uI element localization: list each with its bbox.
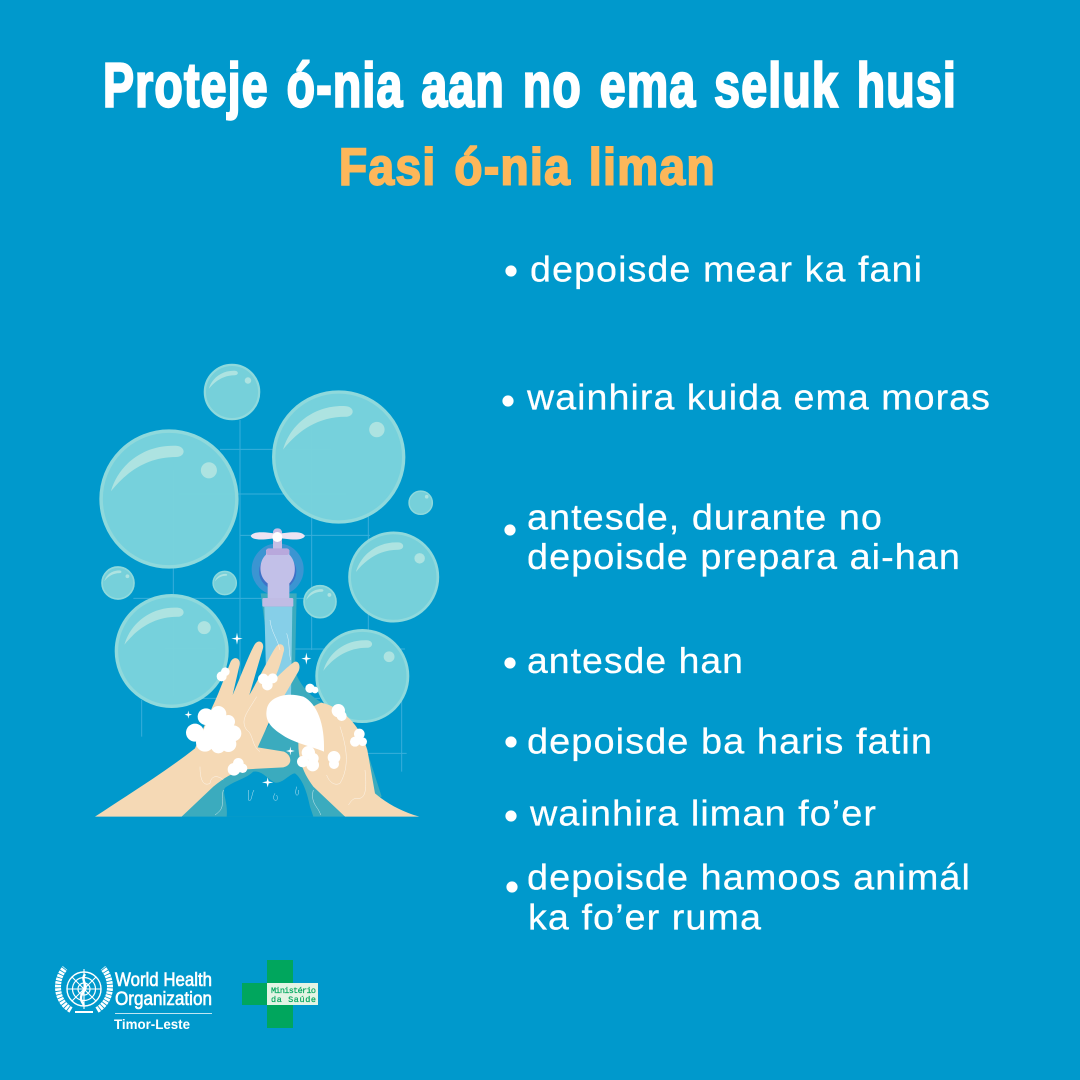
soap suds: [186, 667, 367, 776]
water splash: [182, 593, 382, 817]
list item: antesde, durante no: [527, 496, 883, 538]
right hand: [298, 703, 419, 817]
list item: ka fo’er ruma: [528, 896, 762, 938]
illustration: handwashing with bubbles: [95, 365, 438, 817]
bubble: [102, 567, 134, 599]
water highlight lines: [200, 620, 366, 815]
water drip cut-out: [224, 771, 313, 817]
list item: [506, 856, 971, 938]
list item: depoisde mear ka fani: [530, 248, 923, 290]
bubble: [205, 365, 259, 419]
bubble: [116, 596, 227, 706]
sparkles: [185, 633, 311, 787]
water stream: [264, 607, 292, 697]
logo: World Health Organization Timor-Leste: [58, 968, 212, 1032]
bubble: [101, 431, 237, 567]
bubble: [304, 586, 336, 618]
subtitle: Fasi ó-nia liman: [339, 138, 716, 196]
list item: wainhira kuida ema moras: [526, 376, 991, 418]
logo: World Health Organization Timor-Leste: Organization: [115, 989, 212, 1010]
soap: [266, 695, 324, 752]
left hand: [95, 642, 300, 817]
icon: WHO emblem: [58, 968, 110, 1012]
logo: Ministério da Saúde: Ministério: [271, 986, 316, 996]
list item: depoisde ba haris fatin: [527, 720, 933, 762]
list item: wainhira liman fo’er: [529, 792, 877, 834]
list item: [504, 496, 961, 577]
bubble: [317, 630, 408, 722]
list item: depoisde hamoos animál: [527, 856, 971, 898]
logo: Ministério da Saúde: da Saúde: [271, 995, 316, 1005]
logo: Ministério da Saúde: [242, 960, 318, 1028]
bubble: [350, 533, 438, 621]
logo: World Health Organization Timor-Leste: World Health: [115, 970, 212, 991]
faucet: [251, 528, 305, 607]
bullet list: [502, 248, 991, 938]
list item: antesde han: [527, 640, 744, 681]
logo: World Health Organization Timor-Leste: Timor-Leste: [114, 1017, 190, 1032]
bubble: [274, 392, 404, 522]
list item: depoisde prepara ai-han: [527, 536, 961, 577]
bubble: [213, 571, 236, 595]
bubble: [409, 491, 432, 514]
